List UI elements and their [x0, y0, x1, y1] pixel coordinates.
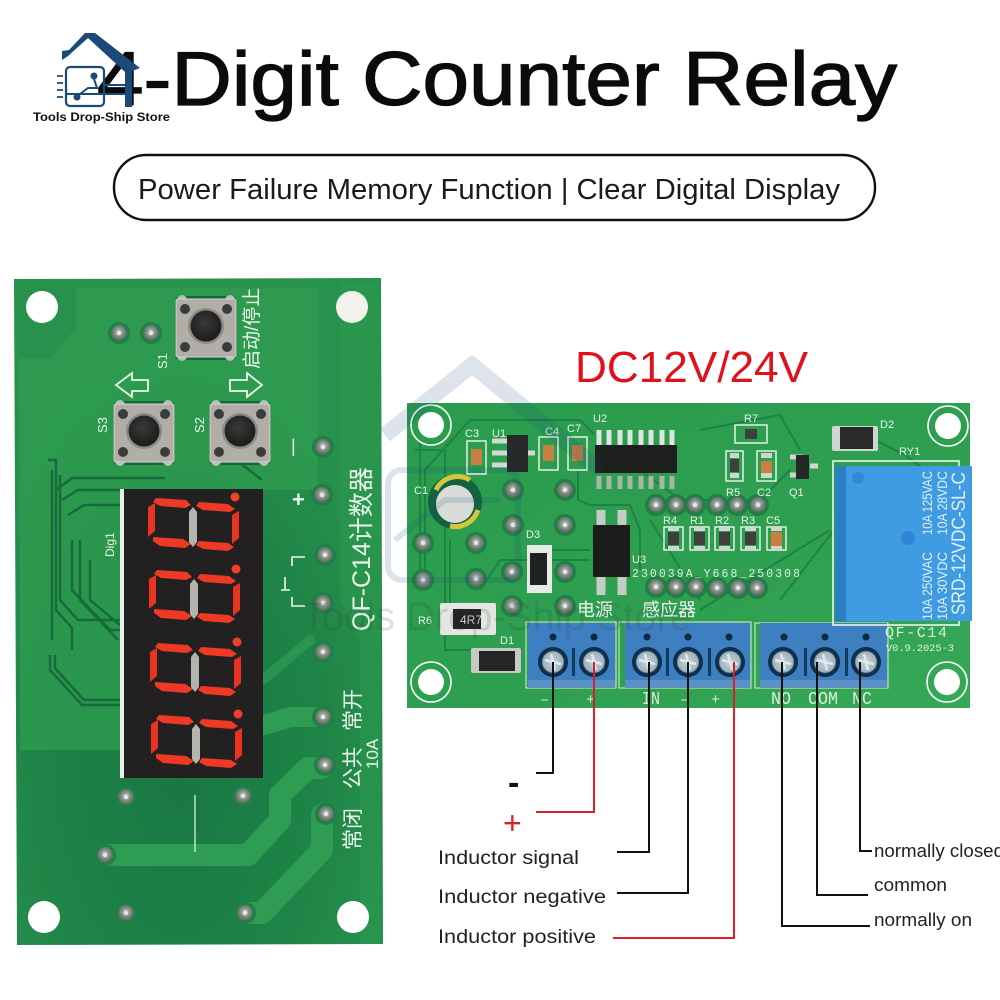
relay: SRD-12VDC-SL-C: [949, 472, 970, 615]
board silkscreen labels: R5: [726, 487, 740, 499]
label: inductor positive: Inductor positive: [438, 926, 596, 948]
silkscreen labels: S2: [192, 417, 207, 433]
terminal block: relay output: [755, 623, 888, 688]
board silkscreen labels: NC: [852, 690, 872, 710]
watermark: Tools Drop-Ship Store: [302, 595, 692, 639]
silkscreen labels: 常开: [342, 689, 365, 731]
label: normally closed: normally closed: [874, 841, 1000, 861]
board silkscreen labels: D1: [500, 635, 514, 647]
board silkscreen labels: 感应器: [642, 600, 696, 620]
silkscreen labels: 启动/停止: [241, 288, 263, 369]
holes with rings: [411, 405, 968, 702]
board silkscreen labels: C5: [766, 515, 780, 527]
silkscreen labels: QF-C14计数器: [348, 467, 376, 631]
voltage label: DC12V/24V: [575, 343, 809, 392]
U3 optocoupler: [593, 510, 630, 595]
title: 4-Digit Counter Relay: [97, 37, 897, 122]
relay: [833, 461, 972, 625]
board silkscreen labels: C3: [465, 428, 479, 440]
board silkscreen labels: QF-C14: [885, 625, 947, 642]
board silkscreen labels: +: [711, 692, 720, 709]
board silkscreen labels: COM: [808, 690, 838, 710]
arrow right: [230, 373, 262, 397]
board silkscreen labels: R4: [663, 515, 677, 527]
board silkscreen labels: –: [540, 692, 549, 709]
relay traces on solder side: [105, 640, 322, 913]
silkscreen labels: S1: [155, 353, 170, 369]
board silkscreen labels: +: [586, 692, 595, 709]
D2 diode: [832, 426, 878, 451]
label: normally on: normally on: [874, 910, 972, 930]
board silkscreen labels: U3: [632, 554, 646, 566]
board silkscreen labels: R2: [715, 515, 729, 527]
silkscreen labels: [95, 288, 382, 852]
display traces: [48, 460, 262, 705]
U1 regulator: [492, 435, 535, 472]
board silkscreen labels: C4: [545, 426, 559, 438]
board silkscreen labels: R1: [690, 515, 704, 527]
board silkscreen labels: U1: [492, 428, 506, 440]
label: inductor signal: Inductor signal: [438, 847, 579, 869]
wiring lines: [536, 662, 872, 938]
terminal block: sensor: [619, 622, 751, 688]
silkscreen labels: S3: [95, 417, 110, 433]
silkscreen labels: 公共: [342, 747, 365, 789]
board silkscreen labels: V0.9.2025-3: [886, 643, 954, 655]
board silkscreen labels: C2: [757, 487, 771, 499]
solder pads: [94, 322, 337, 924]
Q1 transistor: [790, 455, 818, 479]
button S1: [175, 295, 237, 361]
panel: left PCB, display side: [14, 278, 383, 945]
through-hole pads: [412, 479, 769, 617]
relay: 10A 30VDC: [935, 552, 950, 620]
relay: 10A 28VDC: [935, 471, 950, 535]
light pour right strip: [340, 282, 380, 944]
7-segment display: [120, 489, 263, 778]
board silkscreen labels: NO: [771, 690, 791, 710]
board silkscreen labels: R6: [418, 615, 432, 627]
board silkscreen labels: –: [680, 692, 689, 709]
board silkscreen labels: 电源: [577, 600, 613, 620]
R6 resistor: [440, 603, 496, 635]
small SMD parts: [467, 425, 786, 551]
silkscreen labels: 10A: [363, 738, 382, 769]
logo text: Tools Drop-Ship Store: [33, 112, 170, 124]
lighter copper pour: [19, 288, 318, 750]
board silkscreen labels: R7: [744, 413, 758, 425]
board silkscreen labels: C1: [414, 485, 428, 497]
button S3: [113, 400, 175, 466]
subtitle pill: Power Failure Memory Function | Clear Digital Display: [138, 174, 841, 206]
panel: right PCB, component side: [407, 403, 972, 710]
D3 diode: [527, 545, 552, 593]
U2 chip: [595, 430, 677, 489]
board silkscreen labels: D3: [526, 529, 540, 541]
terminal block: power: [526, 622, 616, 688]
label: inductor negative: Inductor negative: [438, 886, 606, 908]
arrow left: [116, 373, 148, 397]
board silkscreen labels: U2: [593, 413, 607, 425]
board silkscreen labels: D2: [880, 419, 894, 431]
board silkscreen labels: R3: [741, 515, 755, 527]
relay: 10A 125VAC: [920, 471, 935, 535]
silkscreen labels: 常闭: [342, 808, 365, 850]
board silkscreen labels: C7: [567, 423, 581, 435]
silkscreen labels: |: [291, 436, 296, 456]
mounting holes: [26, 291, 369, 933]
capacitor C1: [428, 475, 482, 529]
logo: store house: [57, 33, 140, 107]
D1 diode: [471, 648, 521, 673]
minus sign: -: [508, 764, 519, 802]
board silkscreen labels: RY1: [899, 446, 920, 458]
relay: 10A 250VAC: [920, 552, 935, 620]
R6 resistor: 4R7: [460, 613, 482, 627]
label: common: common: [874, 875, 947, 895]
plus sign: +: [503, 805, 522, 841]
silkscreen labels: +: [292, 487, 305, 512]
board silkscreen labels: [414, 413, 954, 710]
subtitle pill: [114, 155, 875, 220]
pcb copper traces: [415, 415, 925, 650]
watermark: [302, 365, 692, 639]
board silkscreen labels: IN: [642, 690, 660, 710]
board silkscreen labels: Q1: [789, 487, 804, 499]
board silkscreen labels: 230039A_Y668_250308: [632, 568, 800, 581]
button S2: [209, 400, 271, 466]
silkscreen labels: Dig1: [103, 532, 117, 557]
